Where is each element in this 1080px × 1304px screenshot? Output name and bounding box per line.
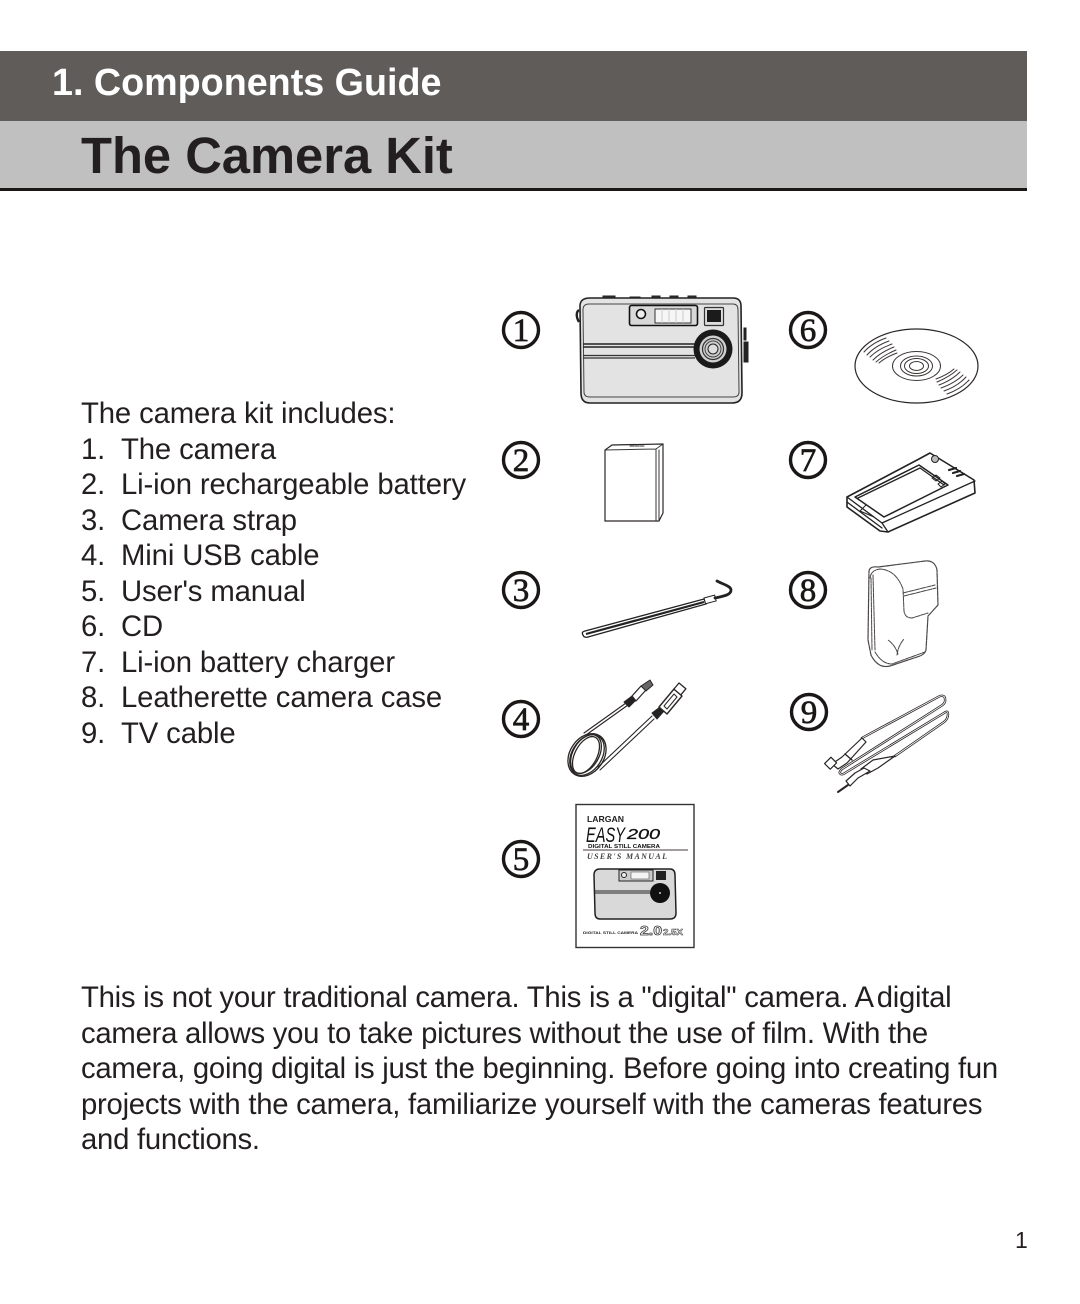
section header bar — [0, 51, 1027, 121]
kit contents list: 5. — [81, 575, 105, 608]
section title: 1. Components Guide — [52, 61, 441, 103]
number 9 — [792, 694, 826, 731]
kit contents list: TV cable — [121, 717, 236, 750]
icon: user's manual: 200 — [626, 826, 661, 843]
intro paragraph: projects with the camera, familiarize yourself with the cameras features — [81, 1088, 982, 1121]
page title band — [0, 121, 1027, 191]
icon: CD — [855, 329, 978, 403]
number 8 — [790, 572, 826, 609]
icon: user's manual: 2.5X — [663, 928, 684, 937]
number 5 — [504, 842, 538, 878]
number 7 — [790, 442, 826, 479]
number 3: 3 — [513, 573, 529, 609]
icon: camera case — [868, 561, 938, 667]
kit contents list: CD — [121, 610, 163, 643]
page title: The Camera Kit — [81, 127, 453, 184]
kit contents list: Camera strap — [121, 504, 297, 537]
intro paragraph: This is not your traditional camera. This is a "digital" camera. A digital — [81, 981, 951, 1014]
number 6 — [790, 312, 826, 349]
kit contents list: 3. — [81, 504, 105, 537]
kit contents list: The camera kit includes: — [81, 397, 395, 430]
icon: user's manual — [576, 804, 694, 948]
icon: user's manual: DIGITAL STILL CAMERA — [588, 844, 660, 850]
intro paragraph: camera allows you to take pictures without the use of film. With the — [81, 1017, 928, 1050]
number 4: 4 — [513, 702, 529, 738]
number 9: 9 — [801, 695, 817, 731]
icon: user's manual: EASY — [586, 824, 626, 847]
kit contents list: Mini USB cable — [121, 539, 319, 572]
kit contents list: The camera — [121, 433, 276, 466]
kit contents list: User's manual — [121, 575, 306, 608]
icon: TV cable — [825, 696, 948, 792]
intro paragraph: camera, going digital is just the beginning. Before going into creating fun — [81, 1052, 998, 1085]
title underline — [0, 188, 1027, 191]
number 1: 1 — [513, 313, 529, 349]
number 3 — [504, 572, 538, 609]
page number: 1 — [1015, 1227, 1028, 1253]
icon: camera — [577, 296, 748, 403]
kit contents list: 2. — [81, 468, 105, 501]
number 7: 7 — [800, 443, 816, 479]
number 5: 5 — [513, 842, 529, 878]
number 6: 6 — [800, 313, 816, 349]
icon: battery charger — [847, 453, 975, 532]
icon: strap — [582, 581, 731, 637]
number 2: 2 — [513, 443, 529, 479]
icon: battery — [605, 444, 663, 521]
number 2 — [504, 442, 538, 479]
kit contents list: 1. — [81, 433, 105, 466]
kit contents list: 4. — [81, 539, 105, 572]
kit contents list: Li-ion battery charger — [121, 646, 395, 679]
number 8: 8 — [800, 573, 816, 609]
icon: user's manual: 2.0 — [640, 923, 662, 938]
icon: user's manual: USER'S MANUAL — [587, 852, 667, 861]
number 4 — [504, 702, 538, 738]
icon: user's manual: LARGAN — [587, 814, 624, 824]
kit contents list — [81, 397, 466, 750]
icon: mini USB cable — [560, 680, 686, 784]
kit contents list: Li-ion rechargeable battery — [121, 468, 466, 501]
kit contents list: 8. — [81, 681, 105, 714]
kit contents list: 6. — [81, 610, 105, 643]
kit contents list: 7. — [81, 646, 105, 679]
intro paragraph: and functions. — [81, 1123, 260, 1156]
number 1 — [504, 312, 538, 349]
icon: user's manual: DIGITAL STILL CAMERA — [583, 930, 638, 935]
intro paragraph — [81, 981, 998, 1156]
kit contents list: 9. — [81, 717, 105, 750]
kit contents list: Leatherette camera case — [121, 681, 442, 714]
